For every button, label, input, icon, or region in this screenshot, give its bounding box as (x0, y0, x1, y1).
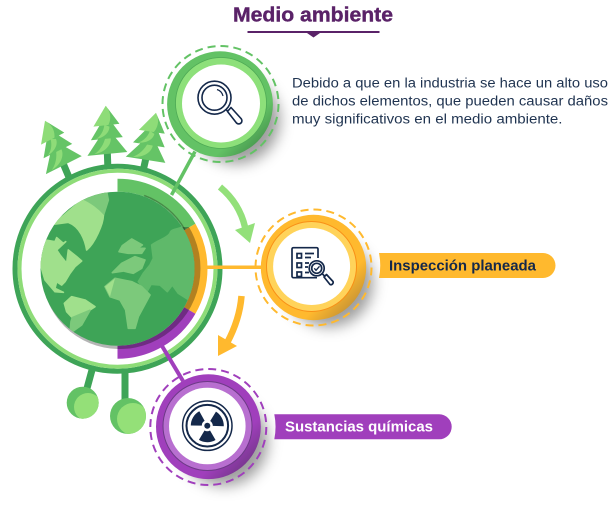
label pill: Inspección planeada (379, 253, 556, 278)
icon: magnifying glass (198, 81, 242, 124)
label pill: Sustancias químicas (274, 414, 452, 439)
description text: de dichos elementos, que pueden causar daños (292, 94, 608, 110)
title underline (248, 31, 380, 38)
arrow: orange curved (218, 296, 242, 356)
description text (292, 76, 608, 128)
icon: radiation symbol (183, 401, 232, 450)
icon: checklist with magnifier (292, 248, 333, 285)
description text: Debido a que en la industria se hace un alto uso (292, 76, 608, 92)
node shadows (180, 76, 373, 486)
node: radiation (purple) (150, 369, 266, 485)
connector lines (162, 152, 263, 381)
lollipop stems and balls (67, 370, 149, 435)
globe (40, 192, 198, 349)
label pill: Inspección planeada: Inspección planeada (389, 258, 537, 274)
arrow: green curved (220, 187, 255, 243)
label pill: Sustancias químicas: Sustancias químicas (285, 420, 433, 436)
node: search (green) (162, 46, 278, 162)
description text: muy significativos en el medio ambiente. (292, 112, 562, 128)
globe rings (15, 166, 220, 371)
segmented arc around globe (118, 178, 208, 359)
title: Medio ambiente (233, 4, 393, 26)
node: inspection (orange) (256, 210, 372, 326)
trees (27, 105, 176, 185)
